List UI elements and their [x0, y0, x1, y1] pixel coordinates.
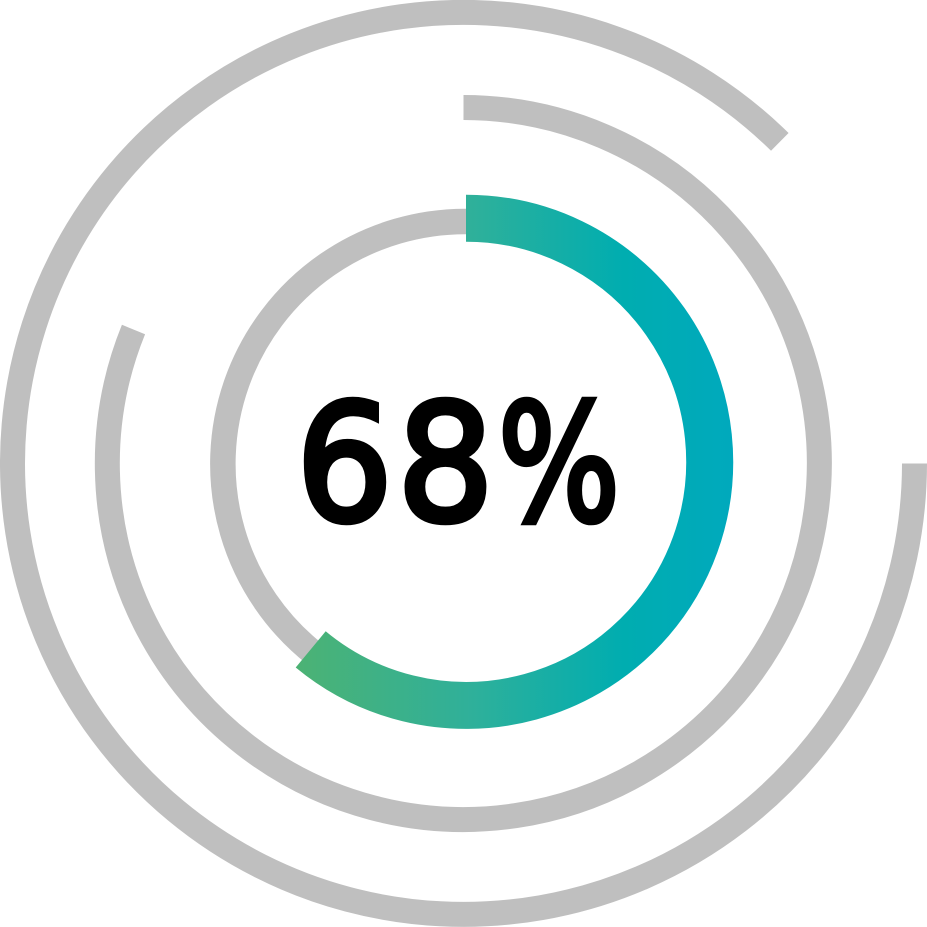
- middle grey ring: [107, 108, 819, 820]
- green-teal progress arc: [311, 218, 710, 705]
- percentage value: 8: [397, 371, 494, 559]
- percentage value: 6: [296, 371, 393, 559]
- percentage value: %: [498, 371, 620, 559]
- inner grey ring: [223, 221, 470, 655]
- percentage value: [296, 371, 620, 559]
